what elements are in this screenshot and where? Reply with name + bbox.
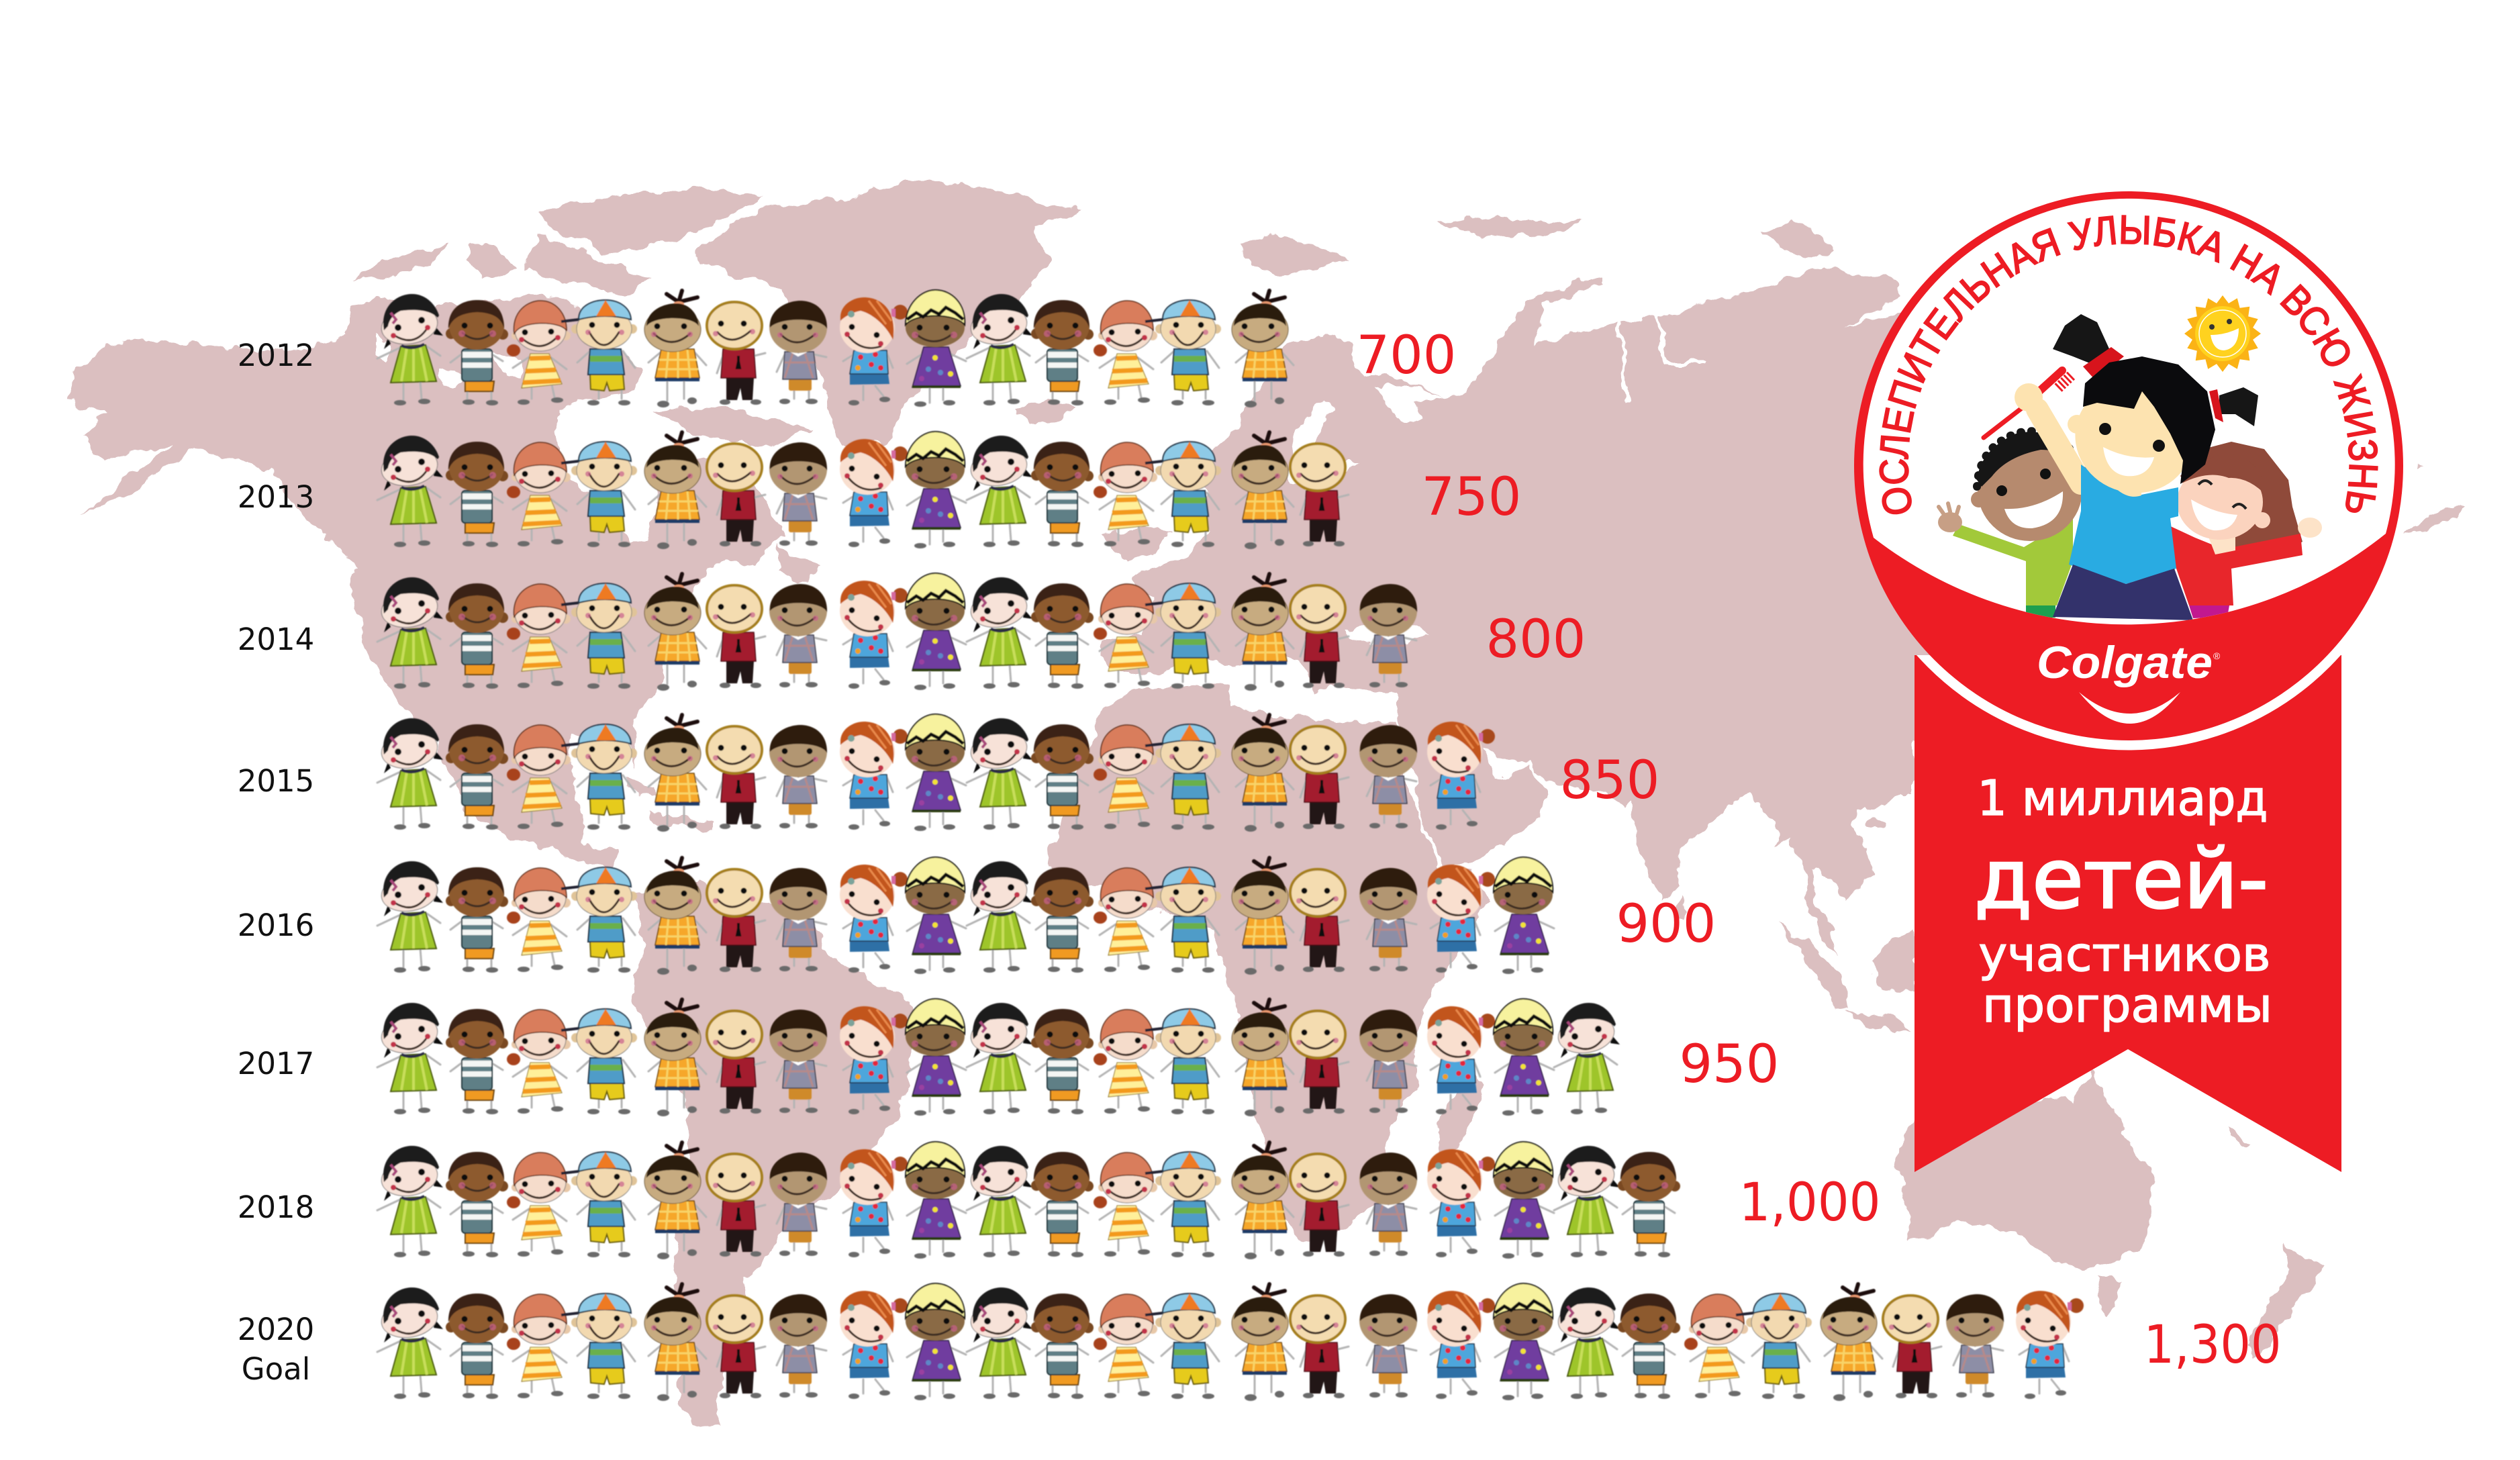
map: Iceland (1014, 399, 1074, 425)
Colgate logo: ® (2213, 650, 2221, 661)
children row: 17 kids (377, 714, 1495, 832)
red ribbon badge (1854, 191, 2403, 1172)
map: South America (631, 880, 920, 1428)
year label 2012: 2012 (238, 338, 314, 373)
ribbon banner (1915, 655, 2341, 1172)
ribbon text: участников: участников (1979, 927, 2270, 982)
children row: 18 kids (377, 857, 1554, 975)
value 750: 750 (1422, 467, 1521, 528)
children row: 16 kids (377, 573, 1417, 691)
row 2016 (238, 857, 1716, 975)
value 800: 800 (1486, 610, 1586, 670)
white arc on ribbon (1917, 655, 2341, 750)
children row: 14 kids (377, 290, 1294, 407)
Colgate logo: Colgate (2037, 637, 2213, 688)
children row: 15 kids (377, 432, 1349, 549)
value 900: 900 (1616, 894, 1716, 955)
map: Arctic islands (354, 188, 822, 582)
value 950: 950 (1680, 1034, 1779, 1095)
map: British Isles (1101, 524, 1171, 561)
Siberian river gulfs (1618, 315, 1705, 403)
row 2015 (238, 714, 1659, 832)
left boy (1938, 431, 2089, 618)
row 2012 (238, 290, 1456, 407)
map: Africa (1048, 682, 1487, 1242)
value 1,300: 1,300 (2144, 1315, 2281, 1375)
year label 2017: 2017 (238, 1046, 314, 1081)
ribbon text: 1 миллиард: 1 миллиард (1978, 770, 2268, 826)
sea: Arctic channels (376, 334, 524, 389)
sea: Baltic and White seas (1289, 386, 1443, 493)
children row: 20 kids (377, 1142, 1680, 1259)
row 2017 (238, 999, 1779, 1116)
round badge disc (1854, 191, 2403, 740)
ribbon text: программы: программы (1982, 978, 2272, 1033)
row 2020 goal (238, 1283, 2281, 1401)
sea: Hudson Bay (557, 409, 661, 544)
curved slogan: ОСЛЕПИТЕЛЬНАЯ УЛЫБКА НА ВСЮ ЖИЗНЬ (1879, 215, 2378, 514)
row 2013 (238, 432, 1521, 549)
sea: Black Sea (1344, 622, 1431, 643)
map: Southeast Asian islands (1678, 894, 1915, 1033)
year label 2020 Goal (238, 1312, 314, 1387)
year label 2016: 2016 (238, 908, 314, 943)
row 2018 (238, 1142, 1881, 1259)
map: Caribbean islands (624, 777, 716, 829)
map: New Zealand (2245, 1241, 2323, 1356)
value 850: 850 (1560, 750, 1659, 811)
year label 2015: 2015 (238, 763, 314, 799)
badge white interior (1863, 199, 2395, 624)
icon: smiling sun (2184, 295, 2261, 372)
map: North America (65, 295, 785, 868)
map: Madagascar (1437, 1074, 1484, 1165)
right girl (2166, 442, 2322, 618)
map: Greenland (691, 179, 1082, 444)
row 2014 (238, 573, 1586, 691)
map: Tasmania (2097, 1279, 2121, 1318)
map: Eurasia (1101, 267, 1947, 955)
value 700: 700 (1357, 326, 1456, 386)
map: Hainan (1865, 818, 1884, 830)
map: Australia (1897, 1071, 2153, 1269)
icon: red toothbrush (1984, 371, 2072, 438)
year label 2018: 2018 (238, 1189, 314, 1225)
year label 2020 Goal: 2020 (238, 1312, 314, 1347)
map: northern and Pacific islands (1238, 215, 2463, 1147)
Colgate logo (2037, 637, 2221, 724)
year label 2013: 2013 (238, 479, 314, 515)
main girl with toothbrush (1984, 314, 2258, 620)
illustration: three children (1938, 314, 2322, 620)
children row: 19 kids (377, 999, 1620, 1116)
year label 2014: 2014 (238, 622, 314, 657)
year label 2020 Goal: Goal (242, 1351, 310, 1387)
value 1,000: 1,000 (1739, 1173, 1881, 1233)
ribbon text: детей-: детей- (1974, 832, 2268, 927)
children row: 26 kids (377, 1283, 2084, 1401)
